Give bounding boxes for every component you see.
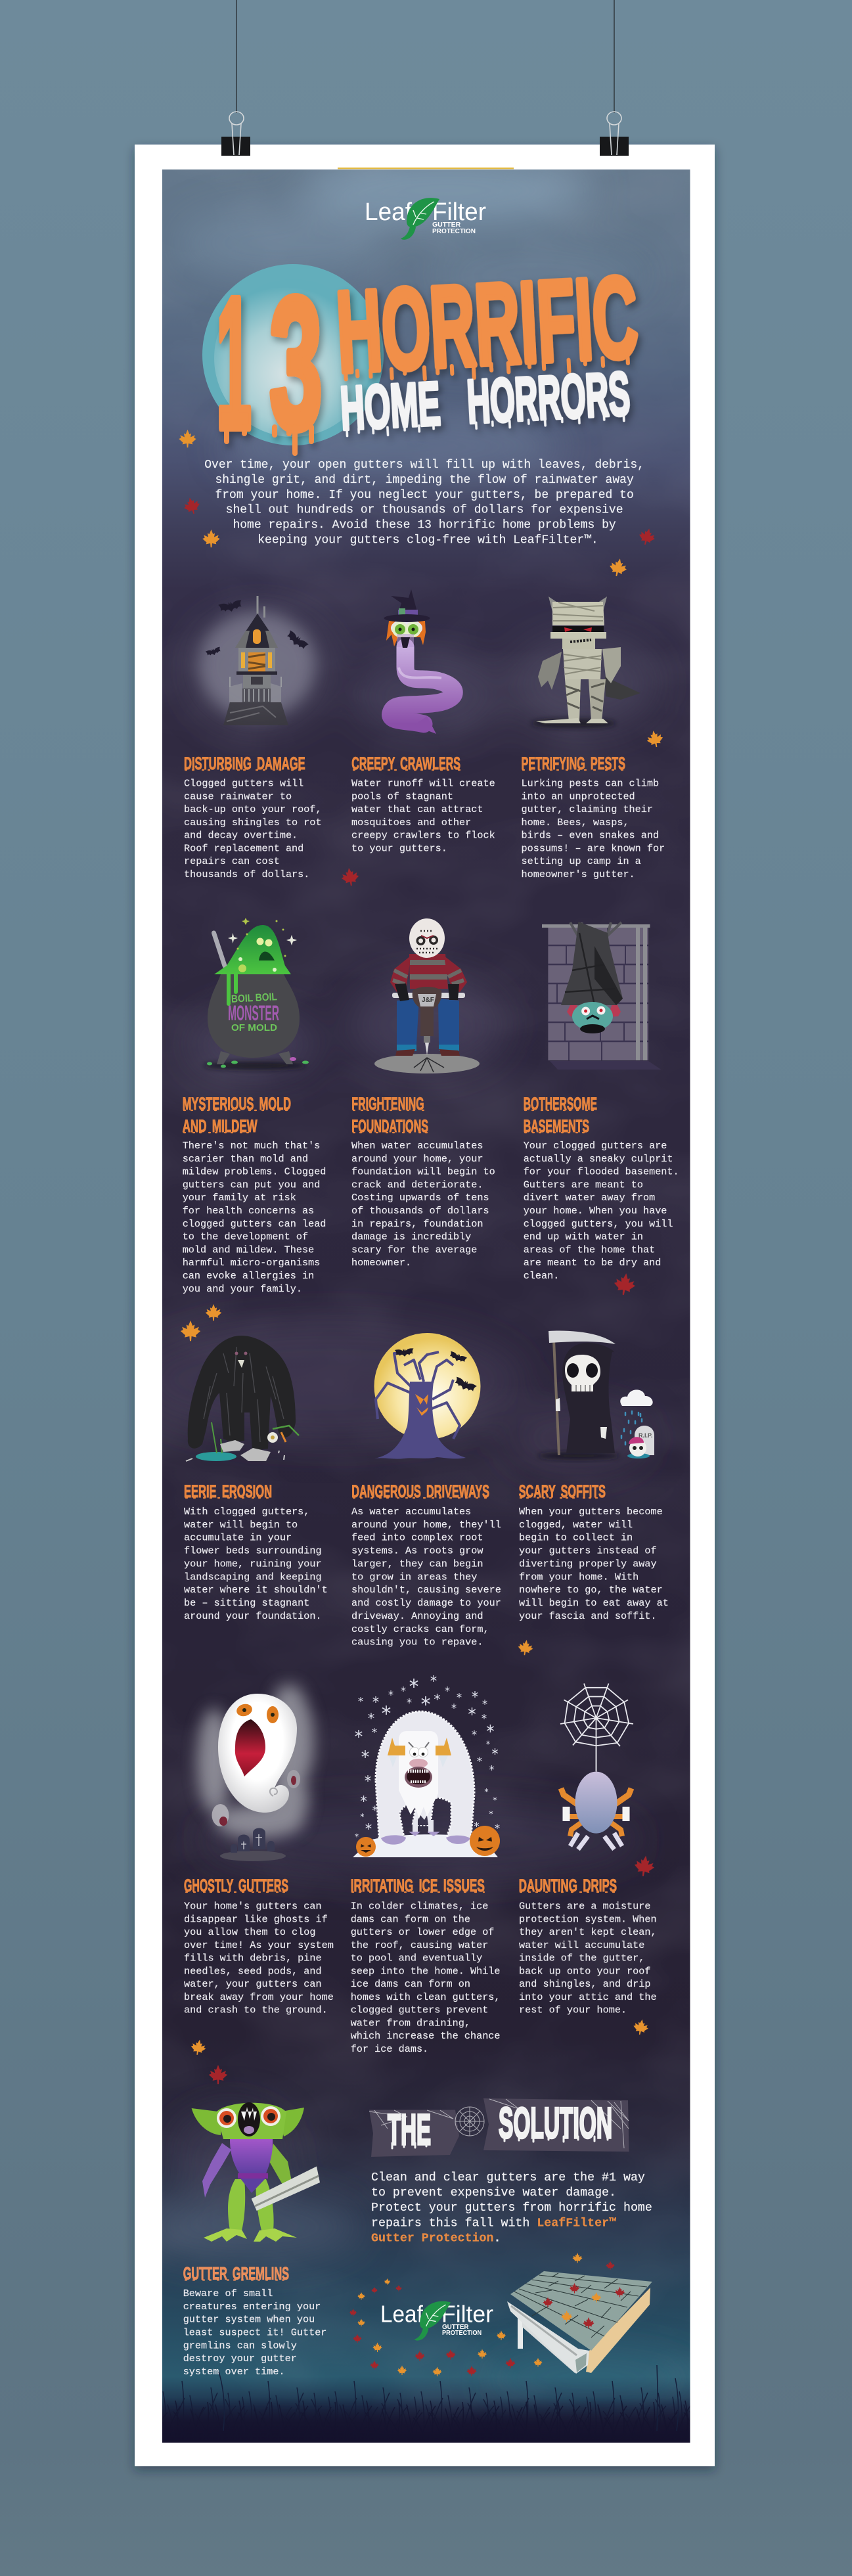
text: Frightening Foundations: scary for the average <box>351 1244 477 1255</box>
text: Irritating Ice Issues: for ice dams. <box>351 2043 428 2055</box>
text: solution paragraph: Gutter Protection. <box>371 2232 501 2245</box>
icon: grim reaper with rain cloud: R.I.P. <box>639 1432 652 1439</box>
title: 13 Horrific Home Horrors <box>202 253 640 468</box>
text: Disturbing Damage: thousands of dollars. <box>184 869 309 880</box>
title number 13: 1 <box>216 259 252 468</box>
text: Eerie Erosion: be – sitting stagnant <box>184 1597 309 1609</box>
text: Eerie Erosion: your home, ruining your <box>184 1558 322 1570</box>
text: Dangerous Driveways: feed into complex root <box>351 1532 483 1544</box>
text: Irritating Ice Issues: ice dams can form on <box>351 1978 470 1990</box>
text: Frightening Foundations: Costing upwards of tens <box>351 1192 489 1204</box>
text: Frightening Foundations: in repairs, foundation <box>351 1218 483 1230</box>
text: Disturbing Damage: Roof replacement and <box>184 842 303 854</box>
heading: Irritating Ice Issues: IRRITATING ICE ISSUES <box>351 1876 485 1895</box>
title number 13: 3 <box>269 259 323 468</box>
icon: cauldron of mold: OF MOLD <box>231 1022 277 1033</box>
logo: LeafFilter top: Filter <box>432 198 486 226</box>
text: Mysterious Mold and Mildew: clogged gutters can lead <box>183 1218 326 1230</box>
heading: Bothersome Basements: BASEMENTS <box>524 1116 589 1136</box>
text: Eerie Erosion: accumulate in your <box>184 1532 292 1544</box>
icon: cauldron of mold: BOIL BOIL <box>231 991 278 1005</box>
text: Dangerous Driveways: and costly damage to your <box>351 1597 501 1609</box>
text: Gutter Gremlins: destroy your gutter <box>183 2353 297 2364</box>
text: Frightening Foundations: of thousands of dollars <box>351 1205 489 1217</box>
text: Daunting Drips: and shingles, and drip <box>519 1978 651 1990</box>
text: Petrifying Pests: home. Bees, wasps, <box>522 817 629 828</box>
text: Disturbing Damage: and decay overtime. <box>184 829 298 841</box>
text: Irritating Ice Issues: water from draining, <box>351 2017 470 2029</box>
heading: Mysterious Mold and Mildew: MYSTERIOUS MOLD <box>183 1094 291 1114</box>
text: solution paragraph: Clean and clear gutters are the #1 way <box>371 2171 645 2184</box>
icon: moon behind title <box>202 264 384 445</box>
text: Disturbing Damage: Clogged gutters will <box>184 778 303 790</box>
text: Dangerous Driveways: larger, they can begin <box>351 1558 483 1570</box>
panel: frightening foundations <box>351 918 495 1269</box>
text: Scary Soffits: diverting properly away <box>519 1558 657 1570</box>
icon: masked man with jackhammer <box>374 918 480 1073</box>
title words HOME HORRORS: HOME <box>339 369 442 443</box>
icon: masked man with jackhammer: J&F <box>422 997 434 1004</box>
text: Scary Soffits: will begin to eat away at <box>519 1597 669 1609</box>
text: Scary Soffits: from your home. With <box>519 1571 639 1583</box>
text: solution paragraph: Protect your gutters from horrific home <box>371 2202 652 2215</box>
text: Dangerous Driveways: causing you to repave. <box>351 1637 483 1648</box>
text: Petrifying Pests: Lurking pests can climb <box>522 778 659 790</box>
panel: scary soffits <box>519 1331 669 1622</box>
logo: LeafFilter bottom: Leaf <box>380 2301 423 2328</box>
heading: Disturbing Damage: DISTURBING DAMAGE <box>184 754 305 773</box>
panel: eerie erosion <box>184 1336 328 1622</box>
panel: ghostly gutters <box>184 1684 334 2016</box>
heading: Bothersome Basements <box>524 1094 597 1136</box>
text: Scary Soffits: When your gutters become <box>519 1506 663 1518</box>
text: Scary Soffits: your fascia and soffit. <box>519 1610 657 1622</box>
heading: Scary Soffits <box>519 1481 606 1501</box>
text: Petrifying Pests: gutter, claiming their <box>522 803 653 815</box>
text: Mysterious Mold and Mildew: mildew problems. Clogged <box>183 1166 326 1178</box>
text: Dangerous Driveways: systems. As roots grow <box>351 1545 483 1557</box>
icon: spider and web <box>560 1683 633 1849</box>
icon: green gremlin holding gutter <box>192 2102 320 2242</box>
heading: Dangerous Driveways: DANGEROUS DRIVEWAYS <box>351 1481 489 1501</box>
grass silhouette <box>162 2365 690 2443</box>
panel: disturbing damage <box>184 596 322 880</box>
text: Irritating Ice Issues: to pool and eventually <box>351 1953 482 1964</box>
logo: LeafFilter top: PROTECTION <box>432 227 476 235</box>
icon: dead tree and full moon <box>374 1333 481 1459</box>
text: Bothersome Basements: Your clogged gutters are <box>524 1140 667 1152</box>
text: Bothersome Basements: actually a sneaky culprit <box>524 1153 673 1165</box>
text: Irritating Ice Issues: In colder climates, ice <box>351 1900 488 1912</box>
heading: Ghostly Gutters: GHOSTLY GUTTERS <box>184 1876 288 1895</box>
dark poster panel <box>131 158 696 2443</box>
text: Bothersome Basements: your home. When you have <box>524 1205 667 1217</box>
logo: LeafFilter bottom <box>380 2301 493 2341</box>
text: Irritating Ice Issues: the roof, causing water <box>351 1939 488 1951</box>
text: Bothersome Basements: Gutters are meant to <box>524 1179 643 1190</box>
text: Frightening Foundations: crack and deteriorate. <box>351 1179 483 1190</box>
text: Frightening Foundations: When water accumulates <box>351 1140 483 1152</box>
panel: daunting drips <box>519 1683 657 2016</box>
text: Disturbing Damage: cause rainwater to <box>184 790 292 802</box>
text: Disturbing Damage: back-up onto your roof, <box>184 803 322 815</box>
panel: mysterious mold and mildew <box>183 918 326 1295</box>
falling maple leaves <box>179 430 665 2084</box>
text: Eerie Erosion: landscaping and keeping <box>184 1571 322 1583</box>
text: Eerie Erosion: water where it shouldn't <box>184 1584 328 1596</box>
text: Gutter Gremlins: Beware of small <box>183 2288 273 2299</box>
text: Mysterious Mold and Mildew: There's not much that's <box>183 1140 320 1152</box>
text: Bothersome Basements: clean. <box>524 1270 559 1282</box>
text: Ghostly Gutters: water, your gutters can <box>184 1978 322 1990</box>
text: Eerie Erosion: flower beds surrounding <box>184 1545 322 1557</box>
text: Mysterious Mold and Mildew: gutters can put you and <box>183 1179 320 1190</box>
icon: witch hat worm <box>384 589 454 734</box>
logo: LeafFilter top <box>365 198 486 240</box>
text: Disturbing Damage: repairs can cost <box>184 855 280 867</box>
text: Mysterious Mold and Mildew: harmful micro-organisms <box>183 1257 320 1269</box>
text: Ghostly Gutters: needles, seed pods, and <box>184 1965 322 1977</box>
icon: bat hanging on brick wall <box>542 922 661 1070</box>
text: Frightening Foundations: around your home, your <box>351 1153 483 1165</box>
text: Creepy Crawlers: water that can attract <box>351 803 483 815</box>
text: Frightening Foundations: damage is incredibly <box>351 1231 471 1243</box>
text: Ghostly Gutters: you allow them to clog <box>184 1926 316 1938</box>
text: Ghostly Gutters: fills with debris, pine <box>184 1953 322 1964</box>
text: Gutter Gremlins: creatures entering your <box>183 2301 321 2313</box>
text: Mysterious Mold and Mildew: mold and mildew. These <box>183 1244 314 1255</box>
text: Creepy Crawlers: mosquitoes and other <box>351 817 471 828</box>
panel: gutter gremlins <box>183 2102 326 2378</box>
text: Creepy Crawlers: pools of stagnant <box>351 790 453 802</box>
intro paragraph: shingle grit, and dirt, impeding the flow of rainwater away <box>215 474 634 487</box>
title words HOME HORRORS <box>340 371 636 440</box>
text: solution paragraph: repairs this fall with LeafFilter™ <box>371 2217 616 2230</box>
text: Petrifying Pests: homeowner's gutter. <box>522 869 635 880</box>
icon: yeti with pumpkins and snowflakes <box>353 1675 500 1857</box>
text: Bothersome Basements: areas of the home that <box>524 1244 655 1255</box>
heading: Mysterious Mold and Mildew <box>183 1094 291 1136</box>
text: Dangerous Driveways: shouldn't, causing severe <box>351 1584 501 1596</box>
panel: dangerous driveways <box>351 1333 501 1648</box>
text: Ghostly Gutters: over time! As your system <box>184 1939 334 1951</box>
text: Daunting Drips: Gutters are a moisture <box>519 1900 651 1912</box>
text: solution paragraph: to prevent expensive water damage. <box>371 2186 616 2200</box>
text: Ghostly Gutters: disappear like ghosts if <box>184 1913 328 1925</box>
text: Petrifying Pests: into an unprotected <box>522 790 635 802</box>
text: Daunting Drips: inside of the gutter, <box>519 1953 644 1964</box>
text: Petrifying Pests: setting up camp in a <box>522 855 641 867</box>
text: Creepy Crawlers: creepy crawlers to flock <box>351 829 495 841</box>
logo: LeafFilter top: Leaf <box>365 198 412 226</box>
text: Gutter Gremlins: gutter system when you <box>183 2314 315 2326</box>
logo: LeafFilter bottom: GUTTER <box>442 2324 469 2331</box>
text: Dangerous Driveways: to grow in areas they <box>351 1571 477 1583</box>
text: Dangerous Driveways: driveway. Annoying and <box>351 1610 483 1622</box>
text: Irritating Ice Issues: homes with clean gutters, <box>351 1991 501 2003</box>
text: Bothersome Basements: for your flooded basement. <box>524 1166 679 1178</box>
panel: petrifying pests <box>522 597 665 880</box>
logo: LeafFilter bottom: Filter <box>441 2301 493 2328</box>
text: Mysterious Mold and Mildew: for health concerns as <box>183 1205 314 1217</box>
text: Bothersome Basements: clogged gutters, you will <box>524 1218 673 1230</box>
heading: Frightening Foundations: FRIGHTENING <box>351 1094 424 1114</box>
icon: cauldron of mold <box>204 918 309 1070</box>
heading: Scary Soffits: SCARY SOFFITS <box>519 1481 606 1501</box>
text: Disturbing Damage: causing shingles to rot <box>184 817 322 828</box>
text: Dangerous Driveways: costly cracks can form, <box>351 1623 489 1635</box>
text: Daunting Drips: back up onto your roof <box>519 1965 651 1977</box>
text: Frightening Foundations: homeowner. <box>351 1257 411 1269</box>
text: Irritating Ice Issues: seep into the home. While <box>351 1965 501 1977</box>
text: Irritating Ice Issues: which increase the chance <box>351 2030 501 2042</box>
icon: haunted house <box>199 596 315 725</box>
yellow top strip <box>338 168 514 169</box>
text: Eerie Erosion: around your foundation. <box>184 1610 322 1622</box>
text: Daunting Drips: protection system. When <box>519 1913 657 1925</box>
text: Frightening Foundations: foundation will begin to <box>351 1166 495 1178</box>
text: Bothersome Basements: end up with water in <box>524 1231 643 1243</box>
icon: grim reaper with rain cloud <box>538 1331 654 1459</box>
icon: roof with gutter guard <box>507 2271 652 2374</box>
banner: The Solution <box>369 2098 629 2157</box>
panel: irritating ice issues <box>351 1675 501 2055</box>
text: Daunting Drips: they aren't kept clean, <box>519 1926 657 1938</box>
icons: leaf ring around logo <box>349 2253 625 2376</box>
icon: screaming ghost with graves <box>197 1684 314 1861</box>
text: Ghostly Gutters: Your home's gutters can <box>184 1900 322 1912</box>
text: Creepy Crawlers: Water runoff will create <box>351 778 495 790</box>
heading: Frightening Foundations: FOUNDATIONS <box>351 1116 428 1136</box>
text: Petrifying Pests: birds – even snakes and <box>522 829 659 841</box>
text: Scary Soffits: your gutters instead of <box>519 1545 657 1557</box>
icon: hairy swamp monster <box>186 1336 299 1461</box>
panel: creepy crawlers <box>351 589 495 854</box>
text: Ghostly Gutters: break away from your home <box>184 1991 334 2003</box>
white poster frame <box>135 145 715 2466</box>
heading: Daunting Drips: DAUNTING DRIPS <box>519 1876 617 1895</box>
text: Gutter Gremlins: system over time. <box>183 2366 285 2378</box>
text: Ghostly Gutters: and crash to the ground. <box>184 2004 328 2016</box>
intro paragraph: keeping your gutters clog-free with LeafFilter™. <box>258 533 598 547</box>
text: Eerie Erosion: With clogged gutters, <box>184 1506 309 1518</box>
banner: The Solution: THE <box>388 2105 431 2154</box>
logo: LeafFilter top: GUTTER <box>432 221 461 229</box>
text: Irritating Ice Issues: clogged gutters prevent <box>351 2004 488 2016</box>
logo: LeafFilter bottom: PROTECTION <box>442 2330 482 2337</box>
intro paragraph: Over time, your open gutters will fill up with leaves, debris, <box>204 459 644 472</box>
text: Irritating Ice Issues: dams can form on the <box>351 1913 470 1925</box>
heading: Frightening Foundations <box>351 1094 428 1136</box>
text: Dangerous Driveways: As water accumulates <box>351 1506 471 1518</box>
text: Petrifying Pests: possums! – are known for <box>522 842 665 854</box>
text: Creepy Crawlers: to your gutters. <box>351 842 447 854</box>
icon: cauldron of mold: MONSTER <box>228 1001 279 1025</box>
text: Mysterious Mold and Mildew: you and your family. <box>183 1283 302 1295</box>
text: Daunting Drips: rest of your home. <box>519 2004 627 2016</box>
intro paragraph: shell out hundreds or thousands of dollars for expensive <box>226 504 623 517</box>
text: Bothersome Basements: divert water away from <box>524 1192 655 1204</box>
text: Mysterious Mold and Mildew: to the development of <box>183 1231 308 1243</box>
heading: Eerie Erosion <box>184 1481 272 1501</box>
text: Dangerous Driveways: around your home, they'll <box>351 1519 501 1531</box>
intro paragraph: home repairs. Avoid these 13 horrific home problems by <box>233 519 616 532</box>
heading: Creepy Crawlers: CREEPY CRAWLERS <box>351 754 460 773</box>
text: Scary Soffits: clogged, water will <box>519 1519 633 1531</box>
text: Eerie Erosion: water will begin to <box>184 1519 298 1531</box>
text: Gutter Gremlins: least suspect it! Gutter <box>183 2326 326 2338</box>
title words HOME HORRORS: HORRORS <box>465 359 631 436</box>
intro paragraph: from your home. If you neglect your gutters, be prepared to <box>215 489 634 502</box>
heading: Petrifying Pests: PETRIFYING PESTS <box>522 754 625 773</box>
text: Scary Soffits: begin to collect in <box>519 1532 633 1544</box>
icon: mummy possum <box>531 597 640 728</box>
heading: Gutter Gremlins: GUTTER GREMLINS <box>183 2264 289 2284</box>
text: Bothersome Basements: are meant to be dry and <box>524 1257 661 1269</box>
text: Mysterious Mold and Mildew: your family at risk <box>183 1192 296 1204</box>
text: Irritating Ice Issues: gutters or lower edge of <box>351 1926 494 1938</box>
text: Scary Soffits: nowhere to go, the water <box>519 1584 663 1596</box>
heading: Bothersome Basements: BOTHERSOME <box>524 1094 597 1114</box>
text: Mysterious Mold and Mildew: scarier than mold and <box>183 1153 308 1165</box>
heading: Mysterious Mold and Mildew: AND MILDEW <box>183 1116 258 1136</box>
hanging wires and binder clips <box>221 0 629 156</box>
text: Daunting Drips: into your attic and the <box>519 1991 657 2003</box>
banner: The Solution: SOLUTION <box>499 2098 612 2147</box>
text: Gutter Gremlins: gremlins can slowly <box>183 2339 297 2351</box>
panel: bothersome basements <box>524 922 679 1282</box>
heading: Eerie Erosion: EERIE EROSION <box>184 1481 272 1501</box>
text: Daunting Drips: water will accumulate <box>519 1939 644 1951</box>
title word HORRIFIC <box>337 273 644 386</box>
text: Mysterious Mold and Mildew: can evoke allergies in <box>183 1270 314 1282</box>
